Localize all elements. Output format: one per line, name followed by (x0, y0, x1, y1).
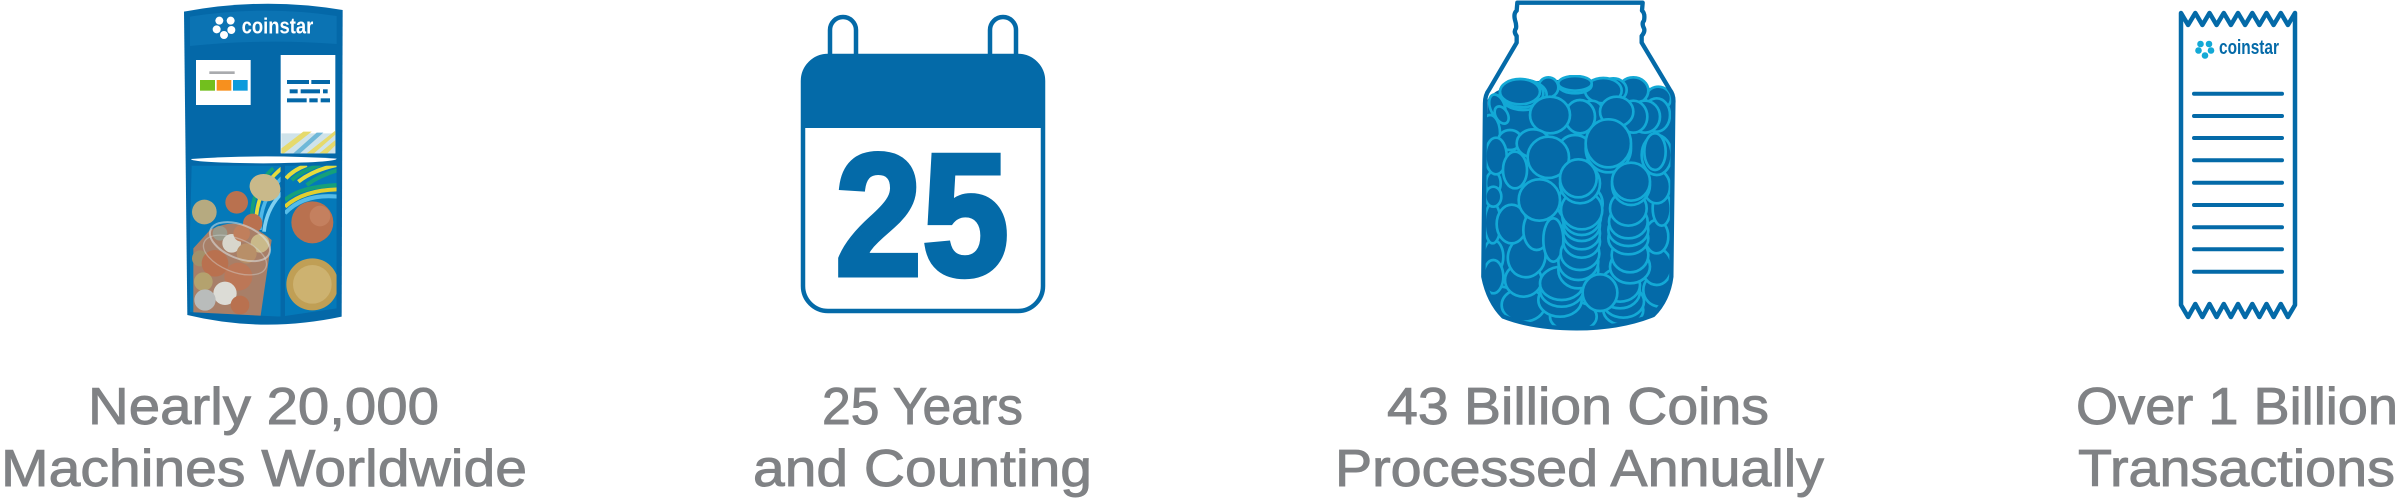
caption: transactions: Over 1 Billion (2076, 378, 2398, 436)
right lower panel (283, 163, 338, 320)
caption: machines: Nearly 20,000 (88, 378, 439, 436)
kiosk body (184, 4, 343, 325)
caption: transactions: Transactions (2078, 440, 2395, 498)
caption: coins (1335, 378, 1824, 498)
kiosk shelf (191, 156, 337, 163)
caption: coins: Processed Annually (1335, 440, 1824, 498)
receipt outline (2181, 13, 2295, 317)
kiosk logo (213, 13, 314, 39)
icon: jar of coins (1480, 3, 1677, 335)
receipt logo (2195, 37, 2279, 59)
caption: years: 25 Years (822, 378, 1023, 436)
calendar header (801, 54, 1045, 128)
caption: years: and Counting (753, 440, 1092, 498)
right instruction card (281, 55, 335, 153)
caption: years (753, 378, 1092, 498)
left screen card (196, 60, 251, 105)
kiosk header band (190, 11, 337, 46)
caption: transactions (2076, 378, 2398, 498)
jar outline (1483, 3, 1673, 328)
icon: receipt (2181, 13, 2295, 317)
receipt logo: coinstar (2219, 37, 2279, 59)
caption: coins: 43 Billion Coins (1387, 378, 1769, 436)
coin jar (192, 221, 272, 316)
calendar page (803, 56, 1043, 311)
icon: coinstar kiosk (184, 4, 343, 325)
jar coins (1480, 76, 1677, 335)
calendar rings (830, 17, 1016, 56)
receipt lines (2194, 94, 2282, 272)
caption: machines (1, 378, 527, 498)
left lower panel (190, 163, 285, 320)
caption: machines: Machines Worldwide (1, 440, 527, 498)
kiosk logo: coinstar (242, 13, 314, 38)
calendar number: 25 (835, 117, 1009, 312)
icon: calendar 25 (801, 17, 1045, 312)
